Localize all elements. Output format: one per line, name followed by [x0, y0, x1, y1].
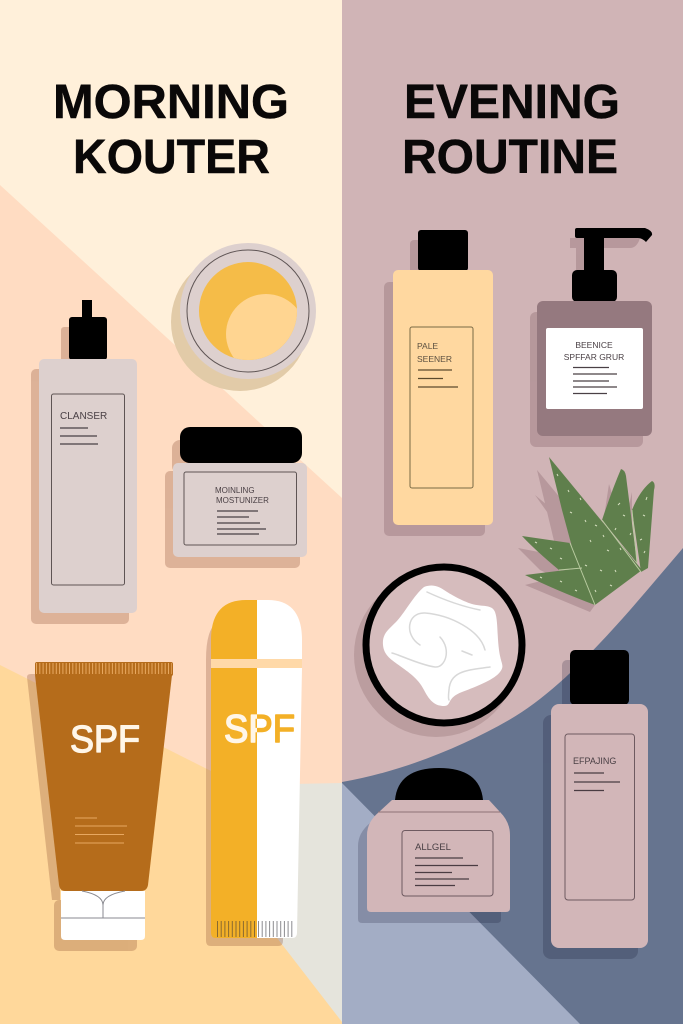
product: pale toner bottle: SEENER	[417, 354, 452, 364]
product: cream jar with white cream swirl	[354, 567, 522, 737]
product: SPF stick: SPF	[224, 708, 295, 751]
product: cleanser bottle	[31, 300, 137, 624]
illustration: aloe leaves	[518, 457, 655, 612]
panel: morning background	[0, 0, 342, 1024]
product: SPF stick: SPF	[224, 708, 295, 751]
product: pale toner bottle: PALE	[417, 341, 438, 351]
title: evening: ROUTINE	[402, 131, 618, 184]
cream blob	[383, 586, 502, 706]
product: morning moisturizer jar: MOSTUNIZER	[216, 496, 269, 505]
product: evening bottle	[543, 650, 648, 959]
title: morning: KOUTER	[73, 131, 270, 184]
product: SPF tube: SPF	[70, 719, 140, 761]
product: pump bottle serum	[530, 228, 652, 447]
product: evening bottle: EFPAJING	[573, 756, 616, 766]
panel: evening background	[342, 0, 683, 1024]
product: cleanser bottle: CLANSER	[60, 411, 107, 422]
product: morning moisturizer jar	[165, 427, 307, 568]
product: pump bottle serum: BEENICE	[575, 340, 613, 350]
product: morning moisturizer jar: MOINLING	[215, 486, 255, 495]
product: aloe gel jar	[358, 768, 510, 923]
product: SPF stick	[206, 600, 302, 946]
product: aloe gel jar: ALLGEL	[415, 842, 451, 853]
product: pale toner bottle	[384, 230, 493, 536]
product: round jar with yellow cream	[171, 243, 316, 391]
title: evening	[402, 76, 620, 184]
title: evening: EVENING	[404, 76, 620, 129]
title: morning	[53, 76, 289, 184]
product: SPF tube	[27, 662, 173, 951]
title: morning: MORNING	[53, 76, 289, 129]
product: pump bottle serum: SPFFAR GRUR	[564, 352, 624, 362]
